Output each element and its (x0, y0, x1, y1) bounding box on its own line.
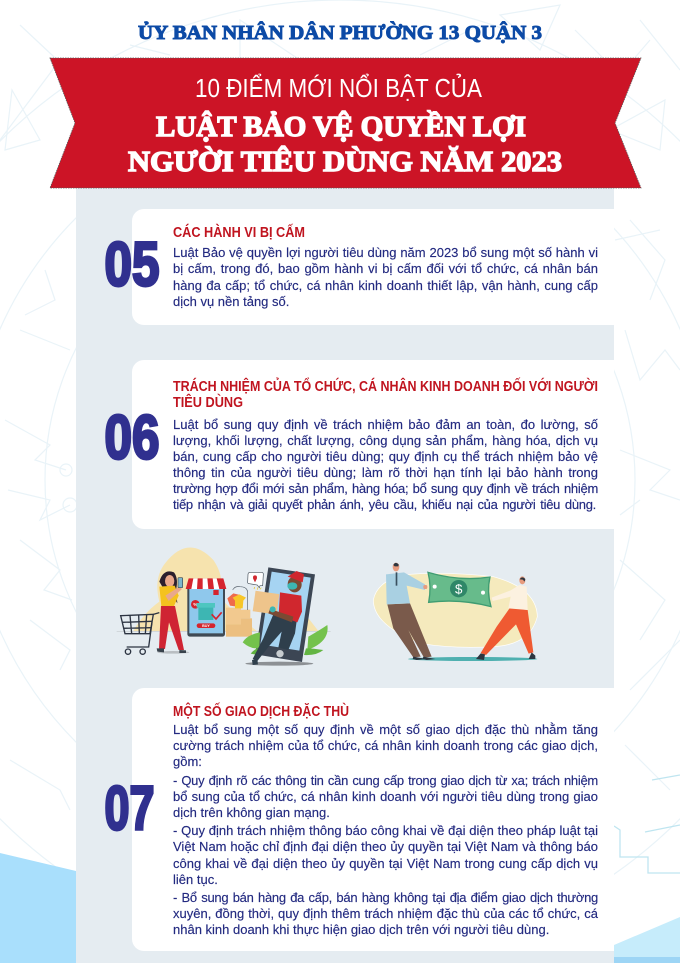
text: tiếp nhận và giải quyết phản ánh, yêu cầu, khiếu nại của người tiêu dùng. (173, 497, 596, 512)
text: bổ sung của tổ chức, cá nhân kinh doanh với người tiêu dùng trong giao (173, 789, 598, 804)
title ribbon: 10 ĐIỂM MỚI NỔI BẬT CỦA (195, 72, 483, 103)
illustration: online shopping and delivery: BUY (202, 624, 210, 628)
text: công khai về đại diện theo ủy quyền tại Việt Nam trong cung cấp dịch vụ (173, 856, 598, 871)
text: thông tin của người tiêu dùng; làm rõ thời hạn tính lại bảo hành trong (173, 465, 598, 480)
panel: card 07 (132, 688, 614, 951)
illustration: online shopping and delivery (116, 548, 331, 666)
store phone (187, 585, 225, 637)
grey content panel (76, 188, 614, 963)
text block 05 (173, 245, 598, 309)
illustration: online shopping and delivery: % (193, 602, 198, 607)
woman (157, 651, 189, 654)
woman (481, 608, 533, 655)
location bubble (248, 572, 263, 588)
heading 05: CÁC HÀNH VI BỊ CẤM (173, 224, 305, 241)
title ribbon: NGƯỜI TIÊU DÙNG NĂM 2023 (128, 145, 562, 178)
heading 06: TIÊU DÙNG (173, 393, 243, 411)
panel: card 06 (132, 360, 614, 529)
teal lines bottom right (614, 775, 680, 873)
courier (253, 614, 297, 661)
text block 07 (173, 722, 598, 937)
text: hàng đa cấp; tổ chức, cá nhân kinh doanh thiết lập, vận hành, cung cấp (173, 278, 598, 293)
text: bán, cung cấp cho người tiêu dùng; quy định cụ thể trách nhiệm bảo vệ (173, 449, 598, 464)
text: bị cấm, trong đó, bao gồm hành vi bị cấm đối với tổ chức, cá nhân bán (173, 261, 598, 276)
man (387, 603, 432, 658)
text: cường trách nhiệm của tổ chức, cá nhân kinh doanh trong các giao dịch, (173, 738, 598, 753)
text: - Bổ sung bán hàng đa cấp, bán hàng không tại địa điểm giao dịch thường (173, 890, 598, 905)
text: dịch vụ nền tảng số. (173, 294, 289, 309)
boxes and clothes (226, 608, 241, 624)
banknote (428, 572, 491, 607)
panel: card 05 (132, 209, 614, 325)
heading 06: TRÁCH NHIỆM CỦA TỔ CHỨC, CÁ NHÂN KINH DOANH ĐỐI VỚI NGƯỜI (173, 377, 598, 395)
text: trường hợp đổi mới sản phẩm, hàng hóa; bổ sung quy định về trách nhiệm (173, 481, 598, 496)
text: - Quy định rõ các thông tin cần cung cấp trong giao dịch từ xa; trách nhiệm (173, 773, 598, 788)
text: dịch trên không gian mạng. (173, 805, 330, 820)
text: gồm: (173, 754, 202, 769)
big phone (255, 567, 315, 662)
illustration: tug of war over money (373, 562, 538, 661)
text: xuyên, đồng thời, quy định thêm trách nhiệm đặc thù của các tổ chức, cá (173, 906, 598, 921)
text: Luật Bảo vệ quyền lợi người tiêu dùng năm 2023 bổ sung một số hành vi (173, 245, 598, 260)
heading 07: MỘT SỐ GIAO DỊCH ĐẶC THÙ (173, 702, 349, 720)
title ribbon: LUẬT BẢO VỆ QUYỀN LỢI (156, 109, 526, 143)
text: nhân kinh doanh khi thực hiện giao dịch trên với người tiêu dùng. (173, 922, 549, 937)
title ribbon (50, 58, 642, 188)
text: liên tục. (173, 872, 218, 887)
number 06: 06 (104, 404, 160, 472)
text: - Quy định trách nhiệm thông báo công khai về đại diện theo pháp luật tại (173, 823, 598, 838)
text: Việt Nam hoặc chỉ định đại diện theo ủy quyền tại Việt Nam và thông báo (173, 839, 598, 854)
organisation heading: ỦY BAN NHÂN DÂN PHƯỜNG 13 QUẬN 3 (138, 20, 542, 44)
text: lượng, khối lượng, chất lượng, công dụng sản phẩm, hàng hóa, dịch vụ (173, 433, 598, 448)
cart (121, 613, 159, 654)
heading 06 (173, 377, 598, 411)
text: Luật bổ sung một số quy định về một số giao dịch đặc thù nhằm tăng (173, 722, 598, 737)
number 07: 07 (104, 774, 154, 844)
illustration: tug of war over money: $ (455, 582, 463, 597)
text block 06 (173, 417, 598, 512)
leaves (243, 632, 260, 648)
number 05: 05 (104, 230, 160, 300)
text: Luật bổ sung quy định về trách nhiệm bảo đảm an toàn, đo lường, số (173, 417, 598, 432)
